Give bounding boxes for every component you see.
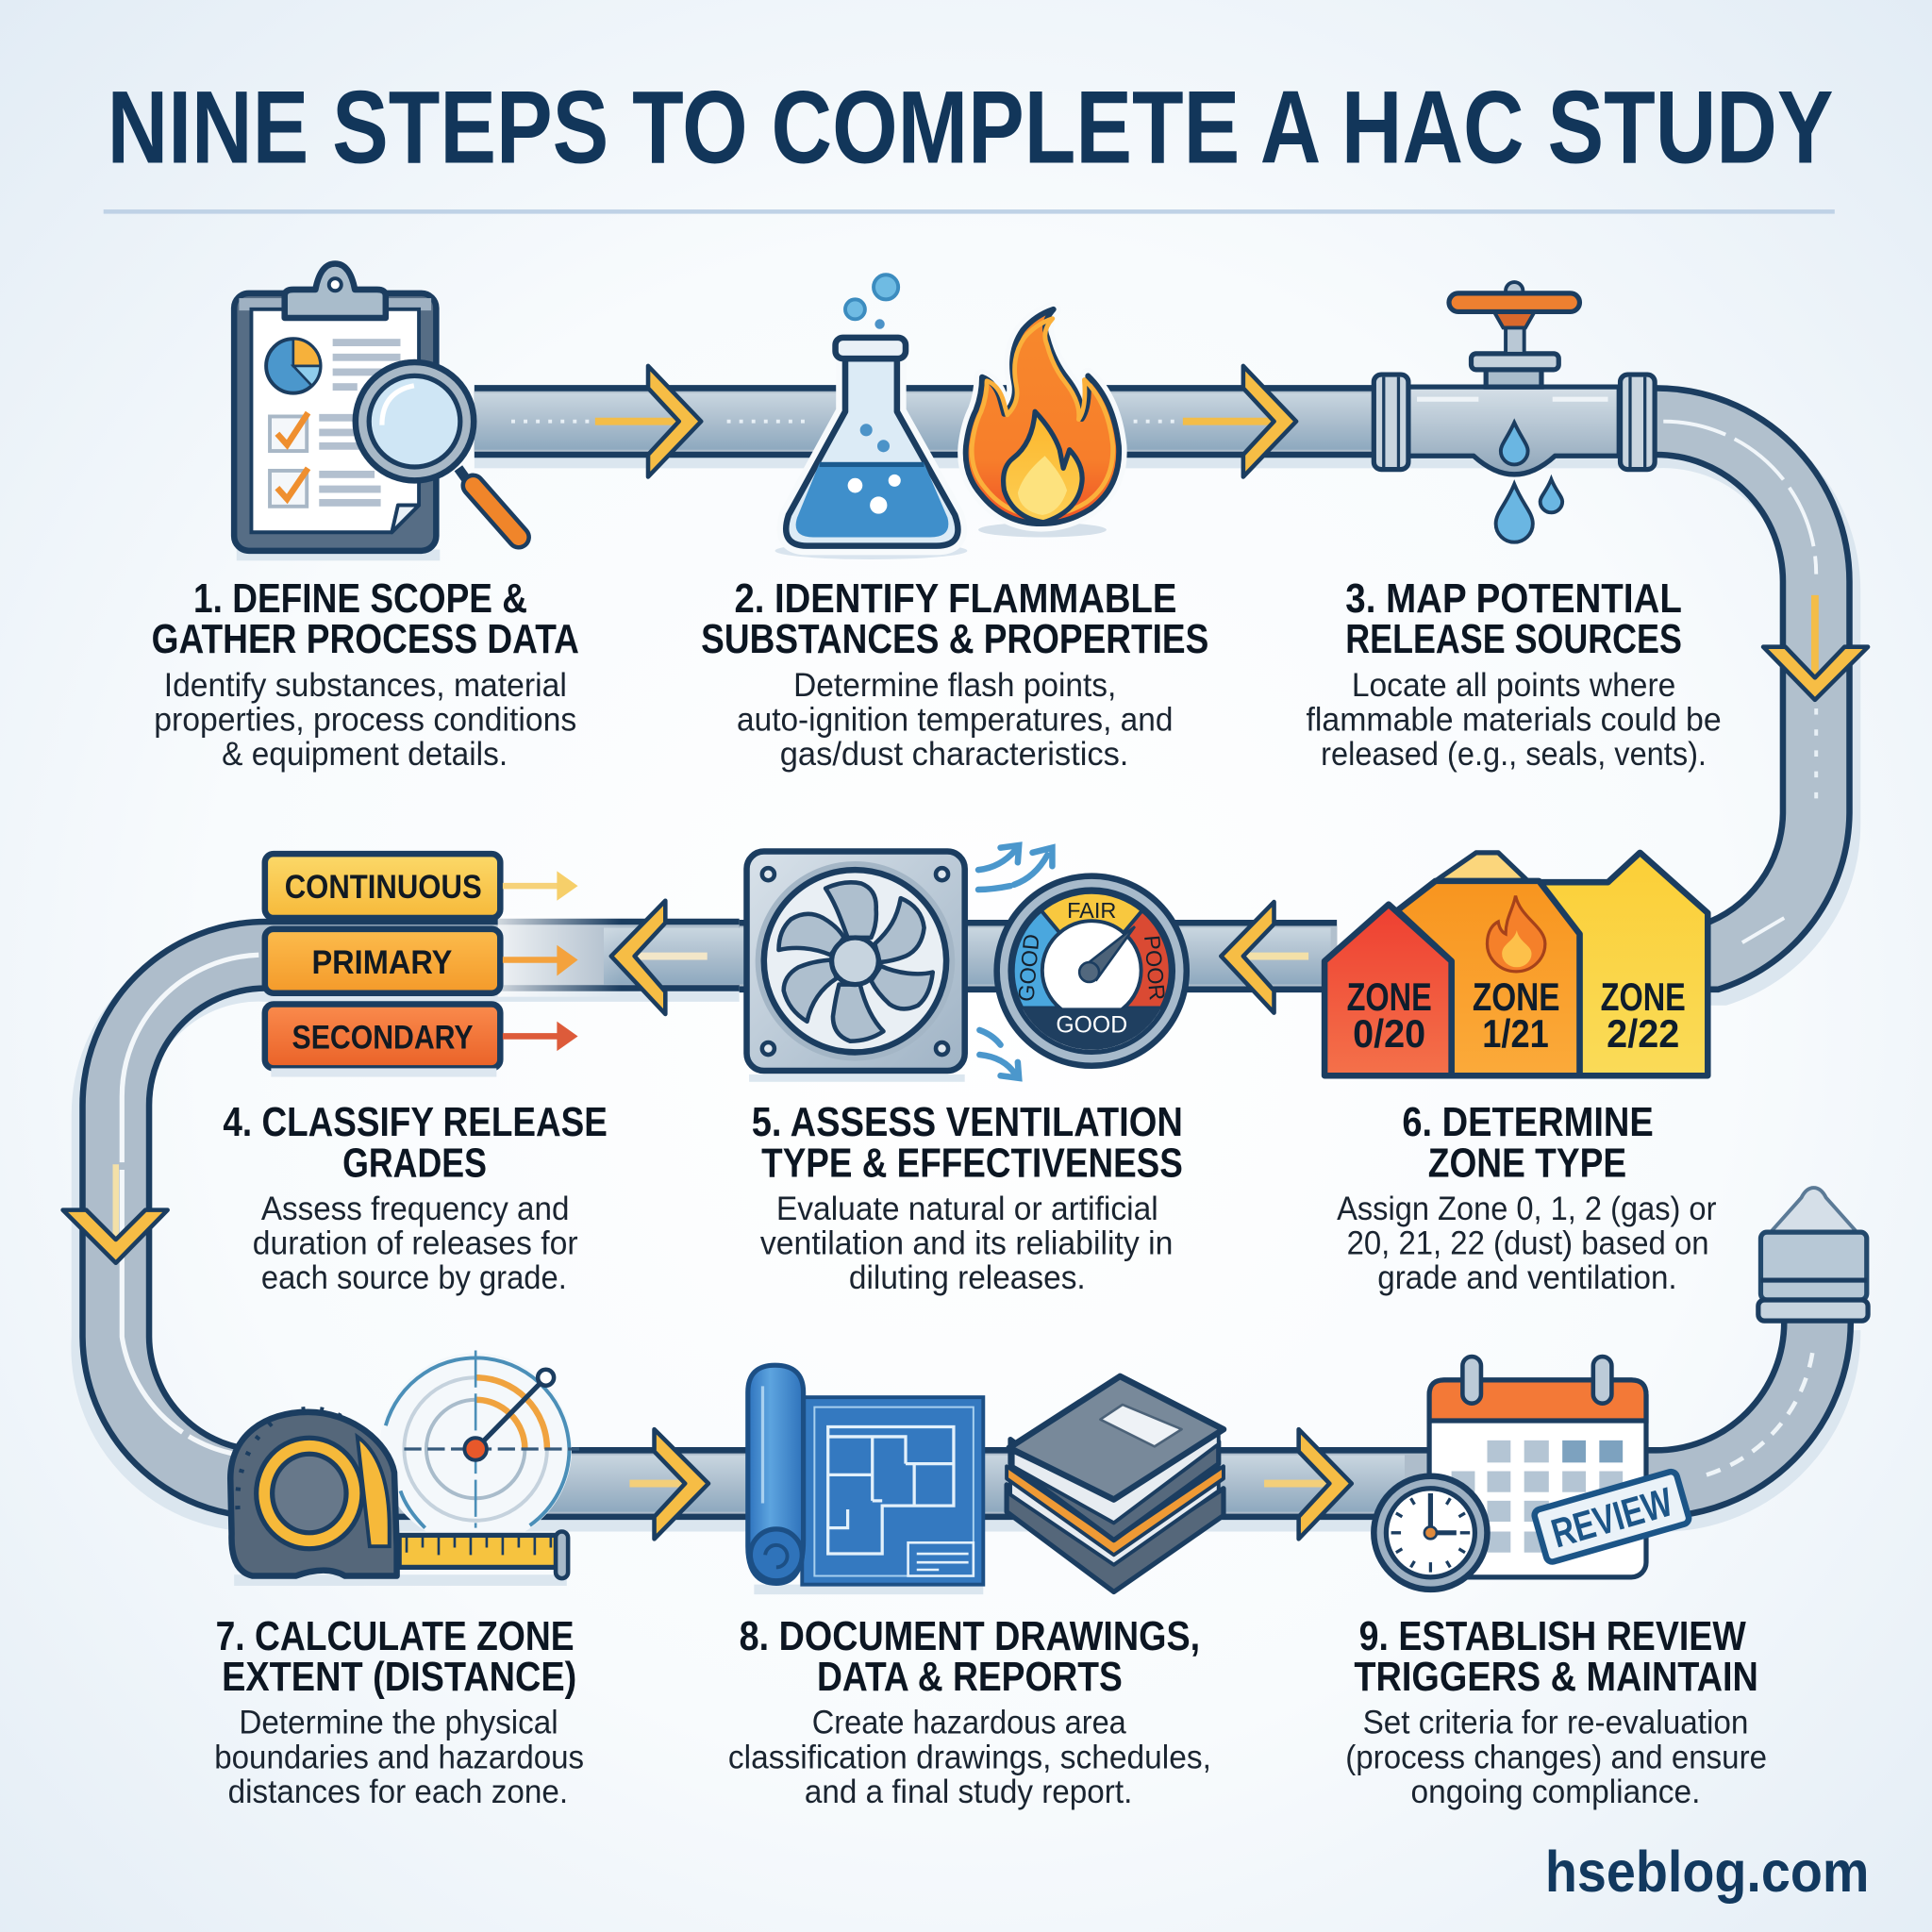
icon: flask with bubbles: [775, 275, 967, 559]
step 4 text: 4. CLASSIFY RELEASE: [223, 1100, 608, 1145]
brand footer: hseblog.com: [1545, 1840, 1869, 1905]
step 6 text: grade and ventilation.: [1377, 1259, 1677, 1296]
icon: airflow arrows: [978, 845, 1052, 1078]
step 2 text: [701, 576, 1208, 773]
step 2 text: SUBSTANCES & PROPERTIES: [701, 617, 1208, 662]
step 1 text: [152, 576, 579, 773]
step 2 text: Determine flash points,: [793, 667, 1116, 704]
step 8 text: Create hazardous area: [812, 1705, 1126, 1741]
step 8 text: and a final study report.: [805, 1774, 1132, 1810]
arrow: step 8 to 9: [1264, 1429, 1352, 1539]
step 5 text: TYPE & EFFECTIVENESS: [761, 1141, 1183, 1186]
arrow: step 5 to 4: [611, 901, 708, 1014]
icon: zone houses: 0/20: [1353, 1011, 1425, 1056]
icon: zone houses: 2/22: [1607, 1011, 1679, 1056]
step 9 text: ongoing compliance.: [1411, 1774, 1700, 1810]
icon: flame: [966, 309, 1119, 537]
icon: ventilation gauge: FAIR: [1067, 898, 1116, 923]
icon: zone houses: ZONE: [1601, 974, 1686, 1019]
step 8 text: classification drawings, schedules,: [728, 1739, 1211, 1775]
step 8 text: DATA & REPORTS: [817, 1655, 1123, 1700]
icon: blueprint: [748, 1365, 983, 1594]
step 9 text: Set criteria for re-evaluation: [1363, 1705, 1748, 1741]
step 6 text: [1337, 1100, 1717, 1296]
step 8 text: [728, 1614, 1211, 1810]
icon: tape measure: [230, 1408, 568, 1586]
step 1 text: Identify substances, material: [164, 667, 567, 704]
icon: ventilation gauge: GOOD: [1013, 933, 1044, 1003]
icon: ventilation fan: [747, 852, 965, 1082]
step 4 text: GRADES: [342, 1141, 487, 1186]
icon: release grade boxes: PRIMARY: [311, 944, 452, 981]
arrow: step 6 to 5: [1221, 902, 1308, 1013]
icon: stacked books: [1007, 1376, 1224, 1592]
step 5 text: 5. ASSESS VENTILATION: [752, 1100, 1183, 1145]
step 1 text: & equipment details.: [222, 736, 508, 773]
icon: release grade boxes: [265, 854, 578, 1077]
step 3 text: released (e.g., seals, vents).: [1321, 736, 1707, 773]
step 6 text: 20, 21, 22 (dust) based on: [1347, 1225, 1709, 1262]
step 9 text: 9. ESTABLISH REVIEW: [1359, 1614, 1746, 1659]
icon: pipe end cap: [1758, 1188, 1868, 1321]
step 8 text: 8. DOCUMENT DRAWINGS,: [740, 1614, 1200, 1659]
icon: zone houses: 1/21: [1482, 1011, 1549, 1056]
step 7 text: Determine the physical: [239, 1705, 558, 1741]
step 2 text: 2. IDENTIFY FLAMMABLE: [734, 576, 1176, 622]
step 9 text: TRIGGERS & MAINTAIN: [1354, 1655, 1758, 1700]
step 5 text: diluting releases.: [849, 1259, 1086, 1296]
step 7 text: distances for each zone.: [228, 1774, 568, 1810]
step 7 text: 7. CALCULATE ZONE: [216, 1614, 575, 1659]
step 1 text: GATHER PROCESS DATA: [152, 617, 579, 662]
icon: zone houses: ZONE: [1347, 974, 1432, 1019]
step 3 text: 3. MAP POTENTIAL: [1345, 576, 1682, 622]
icon: calendar with clock and review stamp: [1374, 1357, 1690, 1590]
review stamp: REVIEW: [1546, 1479, 1677, 1557]
step 6 text: Assign Zone 0, 1, 2 (gas) or: [1337, 1191, 1717, 1227]
step 2 text: auto-ignition temperatures, and: [737, 702, 1173, 739]
step 1 text: 1. DEFINE SCOPE &: [193, 576, 527, 622]
step 3 text: flammable materials could be: [1306, 702, 1722, 739]
step 4 text: Assess frequency and: [261, 1191, 569, 1227]
icon: zone houses: [1324, 853, 1707, 1075]
arrow: step 4 down: [63, 1164, 168, 1263]
step 4 text: duration of releases for: [253, 1225, 578, 1262]
step 9 text: [1345, 1614, 1767, 1810]
icon: leaking valve: [1374, 282, 1655, 542]
arrow: step 7 to 8: [629, 1429, 708, 1539]
step 7 text: [214, 1614, 584, 1810]
step 5 text: ventilation and its reliability in: [760, 1225, 1173, 1262]
step 7 text: boundaries and hazardous: [214, 1739, 584, 1775]
step 2 text: gas/dust characteristics.: [780, 736, 1128, 773]
icon: radar distance target: [379, 1351, 579, 1545]
icon: clipboard and magnifier: [234, 264, 519, 560]
clock: [1374, 1476, 1487, 1590]
step 6 text: 6. DETERMINE: [1402, 1100, 1654, 1145]
step 7 text: EXTENT (DISTANCE): [222, 1655, 576, 1700]
step 1 text: properties, process conditions: [154, 702, 576, 739]
icon: ventilation gauge: POOR: [1140, 934, 1170, 1002]
arrow: step 2 to 3: [1183, 366, 1296, 476]
step 3 text: Locate all points where: [1352, 667, 1675, 704]
step 9 text: (process changes) and ensure: [1345, 1739, 1767, 1775]
step 4 text: each source by grade.: [261, 1259, 567, 1296]
step 5 text: Evaluate natural or artificial: [776, 1191, 1158, 1227]
step 5 text: [752, 1100, 1183, 1296]
step 4 text: [223, 1100, 608, 1296]
process pipeline: [108, 393, 1824, 1512]
icon: ventilation gauge: [997, 876, 1187, 1066]
arrow: step 3 down: [1763, 595, 1868, 700]
icon: zone houses: ZONE: [1473, 974, 1560, 1019]
step 3 text: [1306, 576, 1722, 773]
arrow: step 1 to 2: [595, 366, 701, 476]
icon: release grade boxes: CONTINUOUS: [285, 869, 482, 906]
icon: release grade boxes: SECONDARY: [292, 1020, 474, 1057]
step 6 text: ZONE TYPE: [1428, 1141, 1626, 1186]
step 3 text: RELEASE SOURCES: [1345, 617, 1682, 662]
icon: ventilation gauge: GOOD: [1056, 1013, 1127, 1039]
